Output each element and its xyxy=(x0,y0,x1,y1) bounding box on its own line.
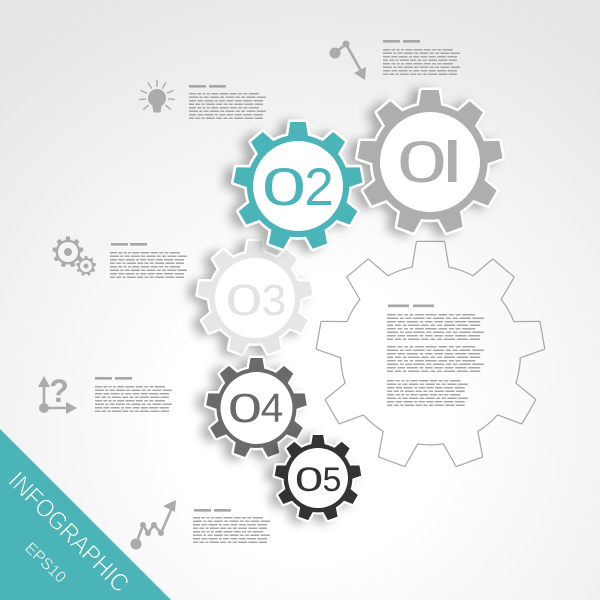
text block: top right xyxy=(383,40,460,74)
gear 04: 0 xyxy=(228,386,262,431)
icon: descending arrow chart xyxy=(330,40,366,80)
icon: axes with question mark: ? xyxy=(49,373,69,409)
gear 03 xyxy=(197,241,313,355)
icon: axes with question mark xyxy=(38,373,77,414)
icon: rising arrow chart xyxy=(130,500,176,550)
icon: light bulb xyxy=(139,80,175,112)
gear 01 xyxy=(357,90,503,234)
gear 03: 3 xyxy=(262,276,286,325)
gear 05: 5 xyxy=(323,461,341,499)
gear 04 xyxy=(206,358,307,458)
gear 03: 0 xyxy=(226,275,262,324)
large gear heading bars xyxy=(388,304,434,307)
corner banner xyxy=(0,429,171,600)
gear 04: 4 xyxy=(261,385,283,431)
gear 02: 2 xyxy=(304,158,334,217)
gear 05 xyxy=(274,435,362,521)
text block: axes xyxy=(95,377,172,411)
icon: two gears xyxy=(52,236,96,276)
text block: gears xyxy=(110,243,187,277)
banner subtitle: EPS10 xyxy=(21,540,69,587)
gear 02: 0 xyxy=(262,158,306,217)
large outlined gear with text xyxy=(316,242,545,467)
gear 02 xyxy=(233,122,363,250)
text block: rising chart xyxy=(193,509,270,542)
text block: light bulb xyxy=(189,85,266,118)
gear 01: 1 xyxy=(436,130,468,195)
gear 01: 0 xyxy=(397,131,447,195)
gear 05: 0 xyxy=(295,461,323,499)
